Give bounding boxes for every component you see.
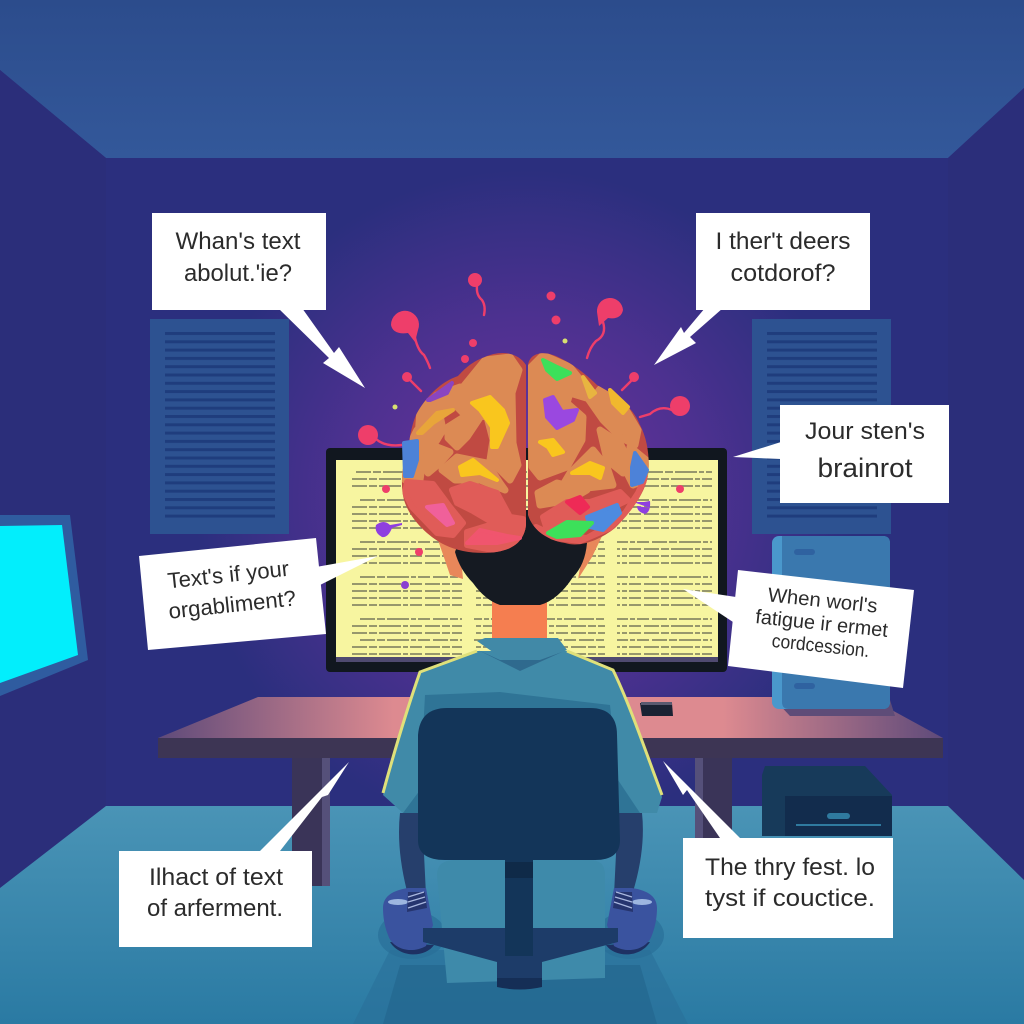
callout 1 xyxy=(152,213,365,388)
ears xyxy=(438,532,604,579)
droplet tails xyxy=(376,286,672,445)
callout 3: brainrot xyxy=(818,453,913,483)
callout 7: tyst if couctice. xyxy=(705,885,875,912)
right shoe xyxy=(606,888,657,954)
droplet heads xyxy=(358,273,690,556)
hair xyxy=(455,510,587,605)
screen text lines xyxy=(352,472,712,654)
orange gyri xyxy=(405,355,646,505)
brain xyxy=(402,353,649,605)
left shoe xyxy=(383,888,434,954)
callout 1: abolut.'ie? xyxy=(184,260,292,287)
brain color patches xyxy=(404,360,647,543)
left hemisphere xyxy=(402,353,526,553)
callout 6: of arferment. xyxy=(147,895,283,922)
callout 4: orgabliment? xyxy=(167,585,297,624)
callout 3: Jour sten's xyxy=(805,418,925,445)
callout 5: When worl's xyxy=(767,584,878,618)
office chair xyxy=(418,708,620,990)
brain lobes xyxy=(405,355,646,550)
column gutters xyxy=(462,465,617,657)
callout 6 xyxy=(119,762,349,947)
left window shutter xyxy=(150,319,289,534)
callout 1: Whan's text xyxy=(176,228,301,255)
back wall xyxy=(106,158,948,808)
callout 4 xyxy=(139,538,378,650)
right hemisphere xyxy=(528,353,649,545)
storage box xyxy=(762,766,892,836)
floor shadow xyxy=(353,911,688,1024)
callout 5: fatigue ir ermet xyxy=(754,606,889,642)
coral gyri xyxy=(405,478,645,550)
desk xyxy=(158,697,943,886)
callout 2 xyxy=(654,213,870,365)
floor xyxy=(0,806,1024,1024)
callout 3 xyxy=(733,405,949,503)
side screen xyxy=(0,515,88,696)
jacket xyxy=(383,638,662,813)
callout 7: The thry fest. lo xyxy=(705,854,875,881)
callout 6: Ilhact of text xyxy=(149,864,283,891)
seated person xyxy=(383,532,662,954)
keyboard device xyxy=(640,702,673,716)
callout 4: Text's if your xyxy=(166,556,290,593)
callout 2: cotdorof? xyxy=(730,260,836,287)
neck xyxy=(492,590,547,645)
computer tower xyxy=(772,536,895,716)
callout 2: I ther't deers xyxy=(716,228,850,255)
colored specks xyxy=(376,338,650,589)
callout 5: cordcession. xyxy=(771,631,870,662)
ceiling xyxy=(0,0,1024,158)
left wall xyxy=(0,70,106,888)
legs xyxy=(399,813,643,895)
monitor xyxy=(326,448,727,672)
callout 7 xyxy=(663,761,893,938)
brain splash xyxy=(358,273,690,589)
right wall xyxy=(948,88,1024,888)
right window shutter xyxy=(752,319,891,534)
callout 5 xyxy=(683,570,914,688)
